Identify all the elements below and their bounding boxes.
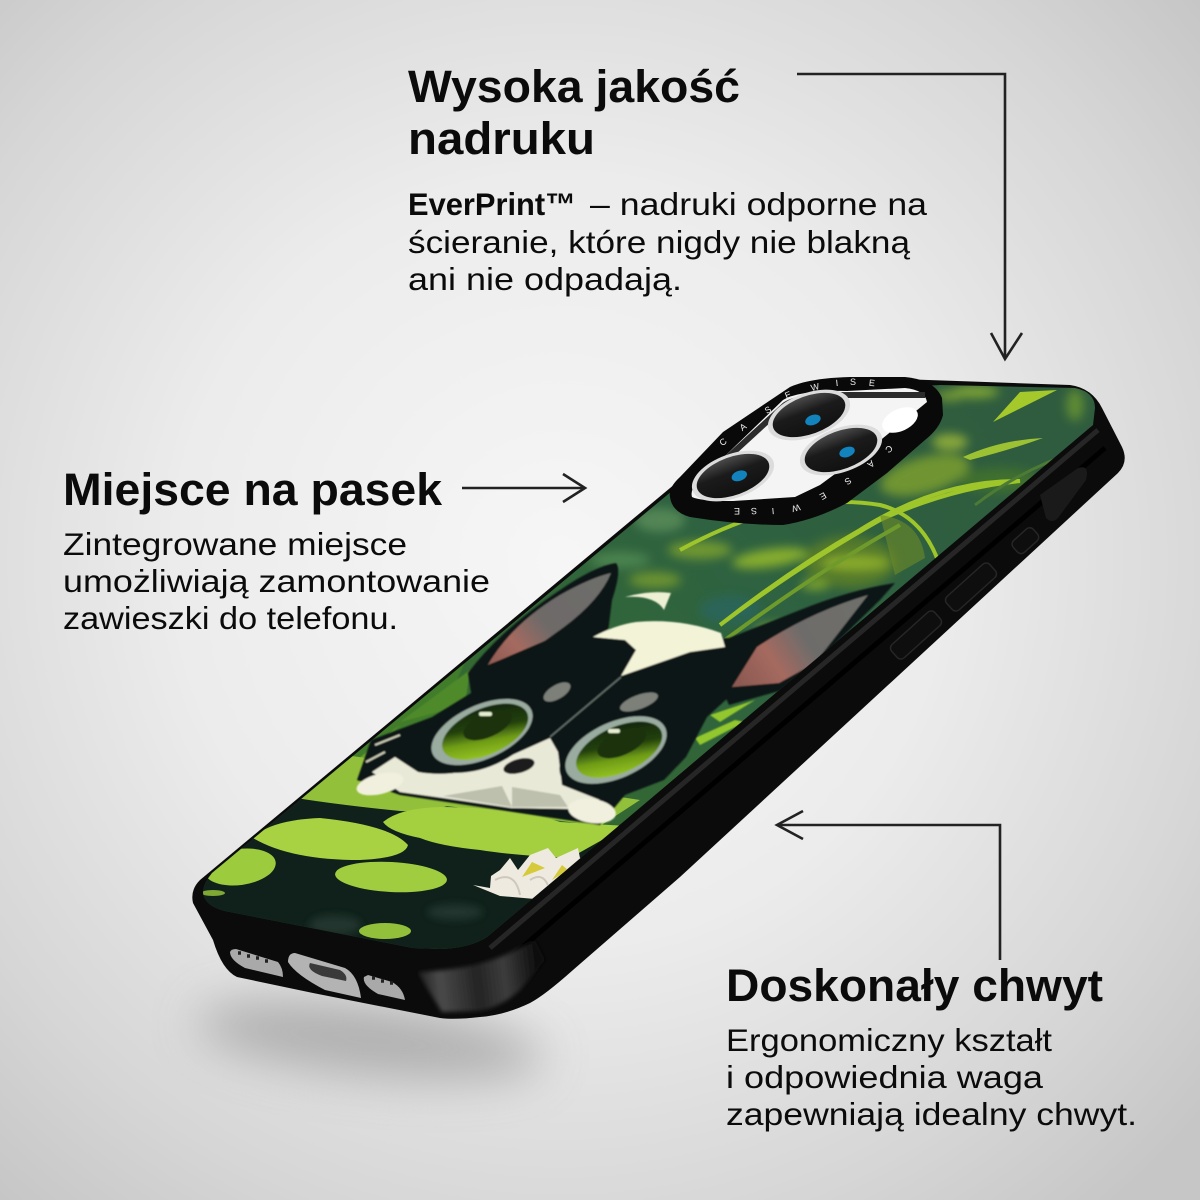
lily pad left (253, 818, 408, 860)
right eye (558, 714, 668, 786)
water lily (473, 848, 581, 899)
left ear inner (486, 573, 611, 668)
description: Zintegrowane miejsce (63, 526, 407, 562)
brand upper: S (850, 377, 856, 387)
forehead marks (542, 681, 572, 703)
brand upper: A (738, 421, 748, 433)
lens left (685, 441, 781, 511)
case body (192, 378, 1125, 1019)
bump frame (670, 377, 943, 525)
brand lower (734, 443, 895, 516)
switch button (1010, 526, 1041, 556)
description: umożliwiają zamontowanie (63, 563, 490, 599)
arrow: strap attachment (462, 474, 585, 502)
arrow: print quality (797, 74, 1022, 359)
head (357, 622, 729, 825)
face white (372, 738, 600, 809)
camera window (692, 388, 927, 501)
heading: nadruku (408, 113, 595, 164)
left speaker (230, 949, 283, 977)
callout: print quality (408, 61, 928, 297)
phone case (192, 378, 1125, 1019)
brand lower: S (843, 475, 853, 487)
case inner edge (505, 448, 1105, 962)
lily pad middle (335, 862, 447, 892)
left eye (430, 698, 534, 774)
volume down button (888, 609, 944, 661)
mottled green around cat (336, 663, 754, 770)
lily pad small (359, 923, 411, 939)
heading: Miejsce na pasek (63, 464, 443, 515)
description: ścieranie, które nigdy nie blakną (408, 224, 911, 260)
description (63, 526, 490, 636)
left paw (356, 774, 396, 796)
brand lower: S (751, 506, 757, 516)
grass blades (680, 390, 1080, 640)
lily pads (201, 755, 640, 939)
callout: grip (726, 960, 1137, 1132)
brand upper: E (783, 389, 793, 401)
lily pad tiny (201, 890, 225, 896)
head fold line (550, 677, 621, 737)
phone artwork (190, 370, 1110, 970)
bottom corner gloss (418, 940, 545, 1012)
brand lower: E (734, 506, 740, 516)
top white patch (593, 621, 725, 676)
camera bump (670, 377, 943, 525)
brand upper: I (835, 378, 839, 388)
volume up button (943, 561, 999, 613)
brand upper (717, 377, 876, 448)
lens right (793, 415, 889, 485)
eye highlights (481, 714, 618, 731)
brand upper: S (763, 404, 773, 416)
lily pad far left (208, 848, 276, 886)
description: Ergonomiczny kształt (726, 1022, 1052, 1058)
description: – nadruki odporne na (590, 186, 928, 222)
right ear (724, 582, 895, 706)
inner shadow (700, 395, 925, 483)
heading (408, 61, 740, 164)
heading: Doskonały chwyt (726, 960, 1103, 1011)
nose (502, 757, 536, 775)
description: i odpowiednia waga (726, 1059, 1044, 1095)
brand upper: E (868, 378, 876, 388)
description (408, 186, 928, 297)
lens flash (878, 402, 922, 438)
brand lower: W (790, 502, 801, 514)
callout: strap attachment (63, 464, 490, 636)
description: ani nie odpadają. (408, 261, 682, 297)
strap slot (1040, 467, 1087, 521)
brand lower: I (771, 506, 775, 516)
left ear (468, 562, 620, 674)
heading: Wysoka jakość (408, 61, 740, 112)
description: EverPrint™ (408, 186, 576, 222)
phone shadow (192, 986, 548, 1094)
blurred foliage (590, 386, 1084, 636)
right ear inner (732, 595, 868, 687)
lens top (761, 380, 857, 450)
brand lower: E (818, 490, 828, 502)
brand upper: W (810, 381, 821, 393)
water reflections (309, 904, 483, 935)
brand upper: C (717, 436, 729, 448)
description (726, 1022, 1137, 1132)
right speaker (364, 975, 405, 1000)
description: zapewniają idealny chwyt. (726, 1096, 1137, 1132)
dark water (203, 792, 607, 949)
artwork background (190, 370, 1110, 970)
description: zawieszki do telefonu. (63, 600, 398, 636)
muzzle shade (443, 786, 568, 807)
case rim highlight (490, 430, 1098, 948)
left fur streaks (366, 735, 400, 762)
hair curl (625, 592, 671, 610)
brand lower: A (865, 458, 877, 470)
cat (354, 563, 895, 826)
charging port (288, 953, 361, 998)
brand lower: C (883, 443, 895, 455)
lily pad large (383, 807, 627, 858)
speaker holes (238, 953, 393, 983)
lily pad top (296, 755, 640, 826)
right paw (567, 798, 617, 825)
arrow: grip (777, 811, 1000, 960)
